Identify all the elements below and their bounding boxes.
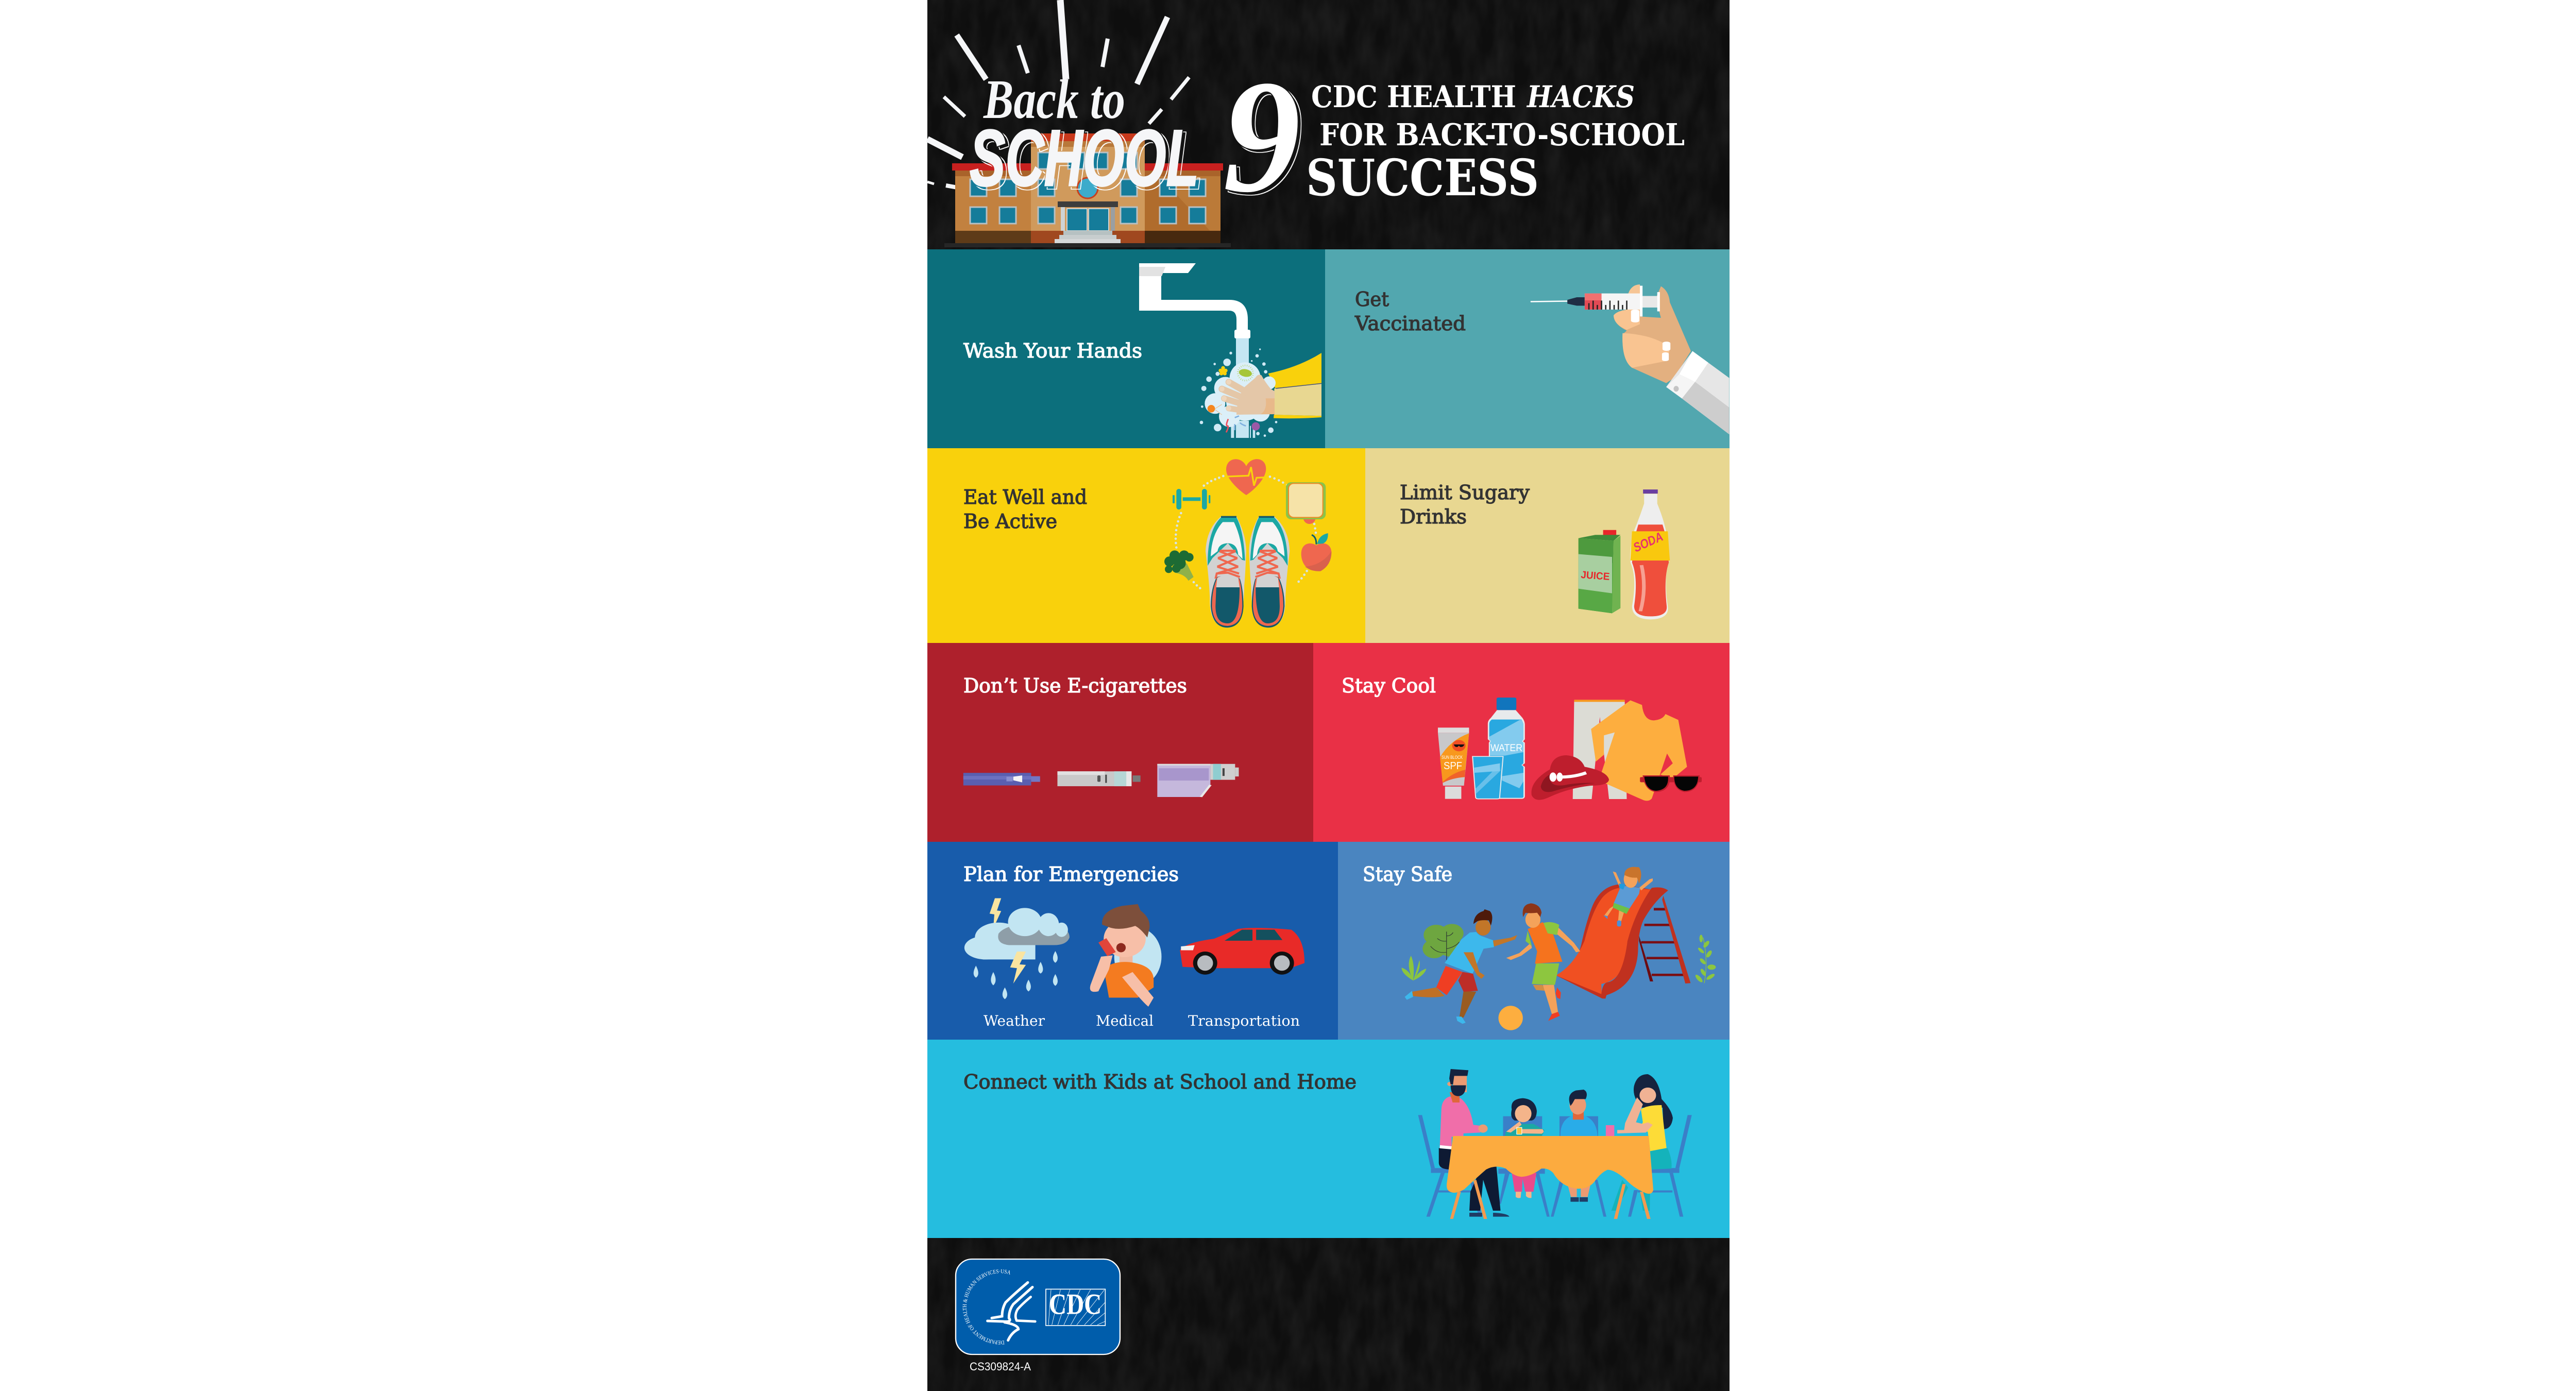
icon: faucet [1139, 263, 1250, 338]
header panel [927, 0, 1730, 249]
icon: e-cigarette devices [963, 764, 1239, 797]
icon: boy [1561, 1090, 1598, 1202]
heading: stay safe: Stay Safe [1363, 863, 1452, 886]
icon: boy in blue shirt [1405, 909, 1517, 1024]
heading: eat well and be active: Be Active [963, 510, 1057, 533]
heading: don't use e-cigarettes: Don’t Use E-cigarettes [963, 674, 1187, 697]
icon: hand holding syringe [1531, 284, 1730, 434]
icon: apple [1301, 533, 1331, 571]
icon: table legs [1450, 1180, 1651, 1219]
icon: girl [1505, 1098, 1544, 1198]
icon: school building [944, 133, 1231, 247]
icon: clothes, hat and sunglasses [1531, 700, 1702, 801]
panel: wash your hands [927, 249, 1325, 448]
panel: plan for emergencies [927, 842, 1338, 1040]
icon: left shoe [1206, 516, 1246, 627]
icon: boy in orange shirt [1506, 903, 1580, 1021]
icon: slide [1556, 885, 1668, 998]
icon: boy using inhaler [1090, 904, 1161, 1007]
icon: juice box: JUICE [1581, 569, 1610, 583]
icon: tree [1422, 924, 1464, 960]
title: CDC health hacks: CDC HEALTH [1311, 79, 1516, 114]
icon: plant left [1401, 956, 1427, 980]
icon: sandwich [1286, 482, 1326, 524]
icon: plant right [1694, 935, 1716, 983]
logo: HHS seal ring text: DEPARTMENT OF HEALTH & HUMAN SERVICES·USA [962, 1269, 1010, 1345]
icon: juice box [1579, 530, 1620, 613]
panel: stay cool [1313, 643, 1730, 842]
icon: dumbbell [1173, 489, 1210, 510]
label: weather: Weather [984, 1012, 1045, 1029]
icon: sunscreen tube [1438, 727, 1469, 799]
heading: eat well and be active [963, 486, 1087, 533]
icon: child on slide [1603, 867, 1653, 926]
panel: limit sugary drinks [1365, 448, 1730, 643]
icon: soda bottle: SODA [1631, 529, 1665, 555]
icon: tablecloth [1447, 1136, 1653, 1194]
footer panel [927, 1238, 1730, 1391]
panel: stay safe [1338, 842, 1730, 1040]
panel: eat well and be active [927, 448, 1365, 643]
icon: dotted circle [1175, 475, 1317, 589]
icon: woman [1606, 1074, 1673, 1211]
icon: water bottle and glass [1472, 698, 1525, 799]
icon: burst rays [927, 0, 1189, 188]
icon: weather clouds [964, 898, 1070, 999]
icon: chairs [1418, 1115, 1692, 1217]
icon: children playing at slide [1401, 867, 1716, 1030]
icon: box vape [1157, 764, 1239, 797]
heading: limit sugary drinks [1400, 481, 1530, 528]
publication code: CS309824-A [970, 1360, 1031, 1373]
icon: family at dining table [1418, 1069, 1692, 1219]
icon: shoes, heart, food and dumbbell [1164, 459, 1331, 627]
heading: connect with kids at school and home: Connect with Kids at School and Home [963, 1071, 1357, 1093]
panel: connect with kids [927, 1040, 1730, 1238]
title: CDC health hacks: HACKS [1526, 79, 1635, 114]
logo: CDC: CDC [1049, 1289, 1101, 1321]
label: medical: Medical [1096, 1012, 1154, 1029]
icon: ball [1498, 1006, 1523, 1030]
icon: man [1439, 1069, 1510, 1217]
heading: eat well and be active: Eat Well and [963, 486, 1087, 508]
icon: sunscreen tube: SUN BLOCK [1442, 755, 1463, 760]
heading: get vaccinated [1354, 288, 1466, 335]
icon: hands under water with germs [1200, 338, 1321, 438]
icon: soda bottle [1630, 489, 1670, 619]
title: success: SUCCESS [1306, 148, 1539, 207]
logo: HHS eagle [988, 1282, 1035, 1341]
icon: ladder [1639, 895, 1690, 983]
heading: wash your hands: Wash Your Hands [963, 340, 1142, 362]
heading: get vaccinated: Get [1355, 288, 1389, 311]
icon: broccoli [1164, 550, 1194, 581]
icon: red car [1180, 928, 1304, 975]
heading: School: SCHOOL [970, 113, 1199, 202]
heading: get vaccinated: Vaccinated [1354, 312, 1466, 335]
title: for back-to-school: FOR BACK-TO-SCHOOL [1319, 117, 1685, 152]
icon: mod vape [1057, 771, 1141, 786]
heading: limit sugary drinks: Drinks [1400, 505, 1467, 528]
heading: limit sugary drinks: Limit Sugary [1400, 481, 1530, 504]
heading: plan for emergencies: Plan for Emergencies [963, 863, 1179, 886]
icon: pen vape [963, 773, 1040, 786]
heading: Back to: Back to [983, 69, 1125, 130]
logo: HHS and CDC [955, 1258, 1121, 1355]
panel: don't use e-cigarettes [927, 643, 1313, 842]
heading: number 9: 9 [1223, 46, 1300, 226]
icon: heart [1226, 459, 1266, 495]
icon: water bottle and glass: WATER [1490, 743, 1522, 754]
label: transportation: Transportation [1188, 1012, 1300, 1029]
heading: stay cool: Stay Cool [1342, 674, 1436, 697]
icon: right shoe [1249, 516, 1290, 627]
panel: get vaccinated [1325, 249, 1730, 448]
icon: sunscreen tube: SPF [1444, 760, 1462, 772]
